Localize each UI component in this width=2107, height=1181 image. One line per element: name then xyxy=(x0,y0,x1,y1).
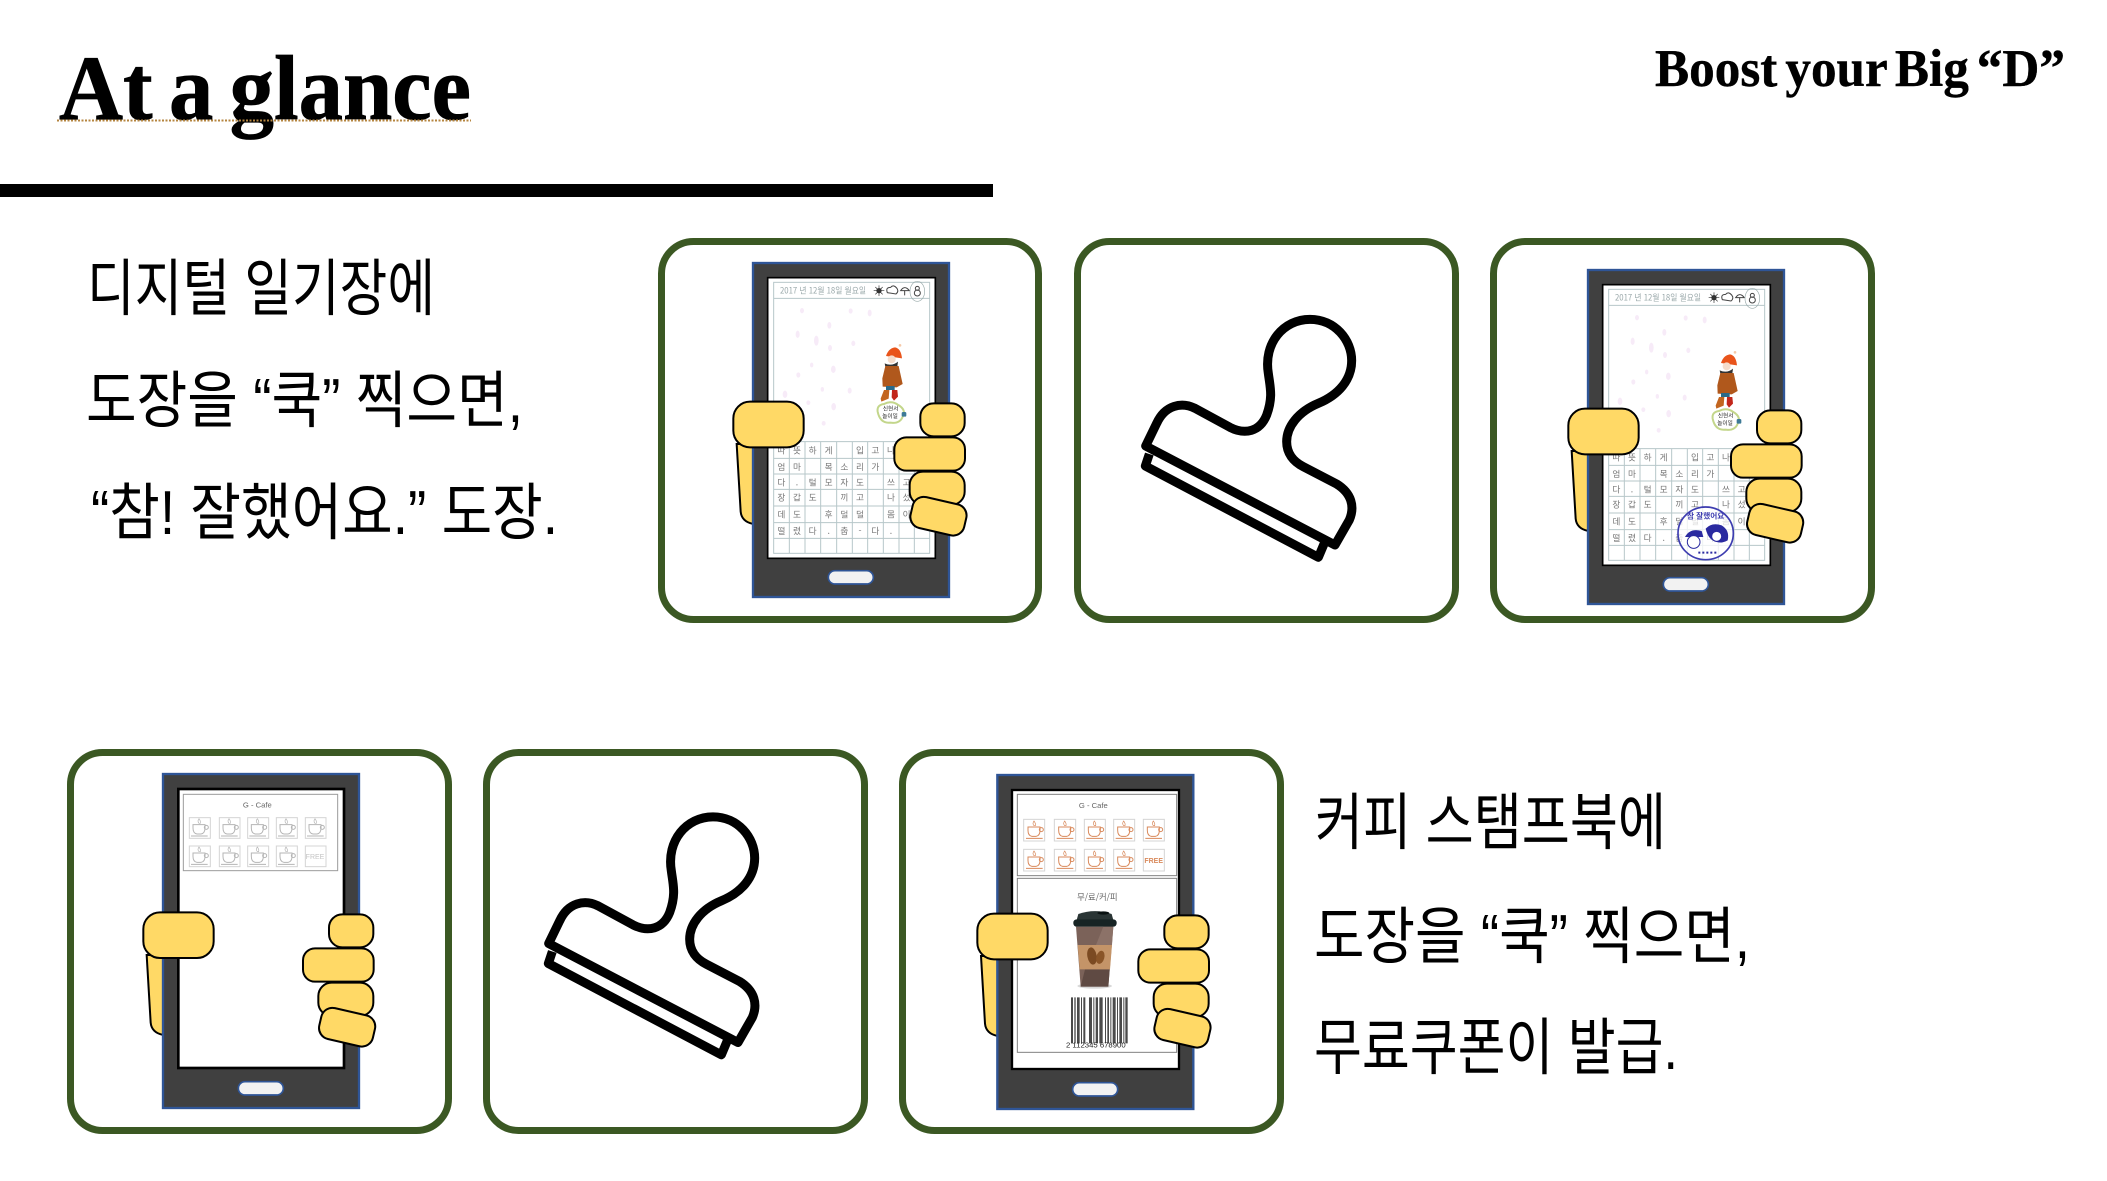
phone with stamped diary: 신현서 xyxy=(1718,411,1733,420)
phone with free coffee coupon: G - Cafe xyxy=(1079,801,1108,810)
phone with empty stamp card: FREE xyxy=(306,854,325,861)
phone with blank diary: 다.털모자도쓰고 xyxy=(777,476,911,488)
phone with stamped diary: 엄마목소리가 xyxy=(1612,468,1714,480)
panel: stamp icon bottom xyxy=(486,752,864,1130)
phone with empty stamp card xyxy=(143,774,377,1108)
phone with blank diary: 떨렸다.춥-다. xyxy=(777,525,892,537)
panel: stamp icon top xyxy=(1078,242,1456,620)
stamp mark: well done: 참 잘했어요 xyxy=(1687,511,1724,522)
phone with stamped diary: 데도후덜덜몸이 xyxy=(1612,515,1746,527)
text block: coffee stamp description: 무료쿠폰이 발급. xyxy=(1314,1014,1678,1083)
phone with stamped diary: 놀이일 xyxy=(1717,418,1733,427)
phone with stamped diary: 다.털모자도쓰고 xyxy=(1612,483,1746,495)
barcode: 2 112345 678900 xyxy=(1066,1043,1126,1050)
title: At a glance xyxy=(59,37,471,139)
panel: diary before stamp xyxy=(662,242,1038,620)
phone with blank diary: 신현서 xyxy=(883,404,898,413)
phone with blank diary: 엄마목소리가 xyxy=(777,461,879,473)
header rule xyxy=(0,184,993,197)
tagline: Boost your Big “D” xyxy=(1655,40,2065,98)
panel: empty coffee stamp card xyxy=(70,752,448,1130)
barcode xyxy=(1066,997,1128,1050)
phone with free coffee coupon: FREE xyxy=(1144,858,1163,865)
phone with stamped diary xyxy=(1568,270,1805,604)
phone with free coffee coupon xyxy=(977,775,1213,1109)
text block: coffee stamp description: 커피 스탬프북에 xyxy=(1315,789,1666,858)
icon: rubber stamp xyxy=(1145,319,1352,557)
stamp mark: well done xyxy=(1678,507,1733,560)
text block: diary description xyxy=(86,255,558,548)
phone with blank diary: 2017 년 12월 18일 월요일 xyxy=(780,284,866,296)
phone with stamped diary: 장갑도끼고나섰 xyxy=(1612,499,1746,511)
phone with free coffee coupon: 무/료/커/피 xyxy=(1077,891,1118,903)
text block: coffee stamp description: 도장을 “쿡” 찍으면, xyxy=(1314,903,1750,972)
text block: diary description: “참! 잘했어요.” 도장. xyxy=(91,479,558,548)
text block: diary description: 도장을 “쿡” 찍으면, xyxy=(86,367,523,436)
phone with stamped diary: 떨렸다.춥-다. xyxy=(1612,532,1727,544)
text block: coffee stamp description xyxy=(1314,789,1750,1083)
coffee cup xyxy=(1073,911,1117,989)
phone with empty stamp card: G - Cafe xyxy=(243,800,272,809)
phone with blank diary xyxy=(733,263,969,597)
phone with blank diary: 놀이일 xyxy=(882,411,898,420)
text block: diary description: 디지털 일기장에 xyxy=(87,255,435,324)
icon: rubber stamp xyxy=(548,817,755,1055)
phone with blank diary: 따뜻하게입고나 xyxy=(777,444,895,456)
panel: full card with free coupon xyxy=(902,752,1280,1130)
panel: diary after stamp xyxy=(1494,242,1872,620)
phone with blank diary: 데도후덜덜몸이 xyxy=(777,508,911,520)
phone with stamped diary: 2017 년 12월 18일 월요일 xyxy=(1615,291,1701,303)
phone with stamped diary: 따뜻하게입고나 xyxy=(1612,451,1730,463)
phone with blank diary: 장갑도끼고나섰 xyxy=(777,492,911,504)
